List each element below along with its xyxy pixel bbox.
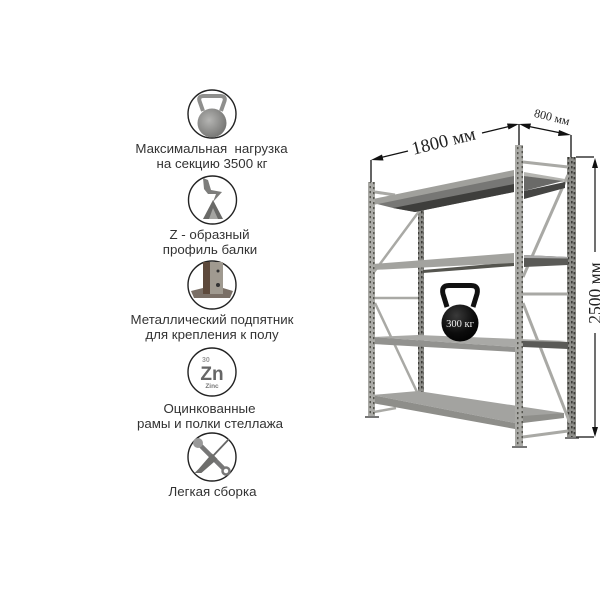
third shelf (372, 335, 568, 352)
foot plates (365, 416, 579, 448)
label: zinc coating: Оцинкованные (163, 401, 256, 416)
bottom shelf (372, 391, 564, 429)
kettlebell weight label: 300 кг (446, 319, 475, 330)
icon: kettlebell (188, 90, 236, 138)
depth value: 800 мм (533, 106, 572, 128)
icon: zinc element: 30 (202, 357, 210, 364)
top shelf (373, 170, 565, 212)
feature: metal foot plate (131, 261, 294, 327)
feature: maximum load (135, 90, 288, 156)
shelving rack (365, 145, 579, 448)
dimension: width 1800 mm (371, 124, 519, 182)
back left upright (418, 206, 424, 394)
dimension: depth 800 mm (519, 106, 572, 157)
feature: Z profile (169, 176, 250, 242)
label: maximum load: Максимальная нагрузка (135, 141, 288, 156)
back right upright (567, 157, 576, 438)
kettlebell 300 kg (442, 286, 478, 342)
label: foot plate: Металлический подпятник (131, 312, 294, 327)
label: easy assembly: Легкая сборка (169, 484, 257, 499)
icon: zinc element (188, 348, 236, 396)
icon: Z profile beam (188, 176, 236, 224)
icon: foot plate (188, 261, 236, 309)
icon: zinc element: Zinc (205, 383, 219, 390)
caption line: floor mounting: для крепления к полу (145, 327, 279, 342)
front right upright (515, 145, 523, 447)
front left upright (368, 182, 375, 417)
label: Z profile: Z - образный (169, 227, 250, 242)
feature: zinc coating (163, 348, 256, 416)
feature: easy assembly (169, 433, 257, 499)
width value: 1800 мм (410, 125, 478, 160)
dimension: height 2500 mm (576, 157, 600, 437)
caption line: section load: на секцию 3500 кг (157, 156, 268, 171)
icon: wrench and screwdriver (188, 433, 236, 481)
icon: zinc element: Zn (200, 364, 224, 385)
caption line: frames and shelves: рамы и полки стеллажа (137, 416, 284, 431)
left frame braces (374, 192, 420, 412)
second shelf (373, 253, 568, 273)
right frame braces (523, 162, 570, 437)
caption line: beam profile: профиль балки (163, 242, 257, 257)
